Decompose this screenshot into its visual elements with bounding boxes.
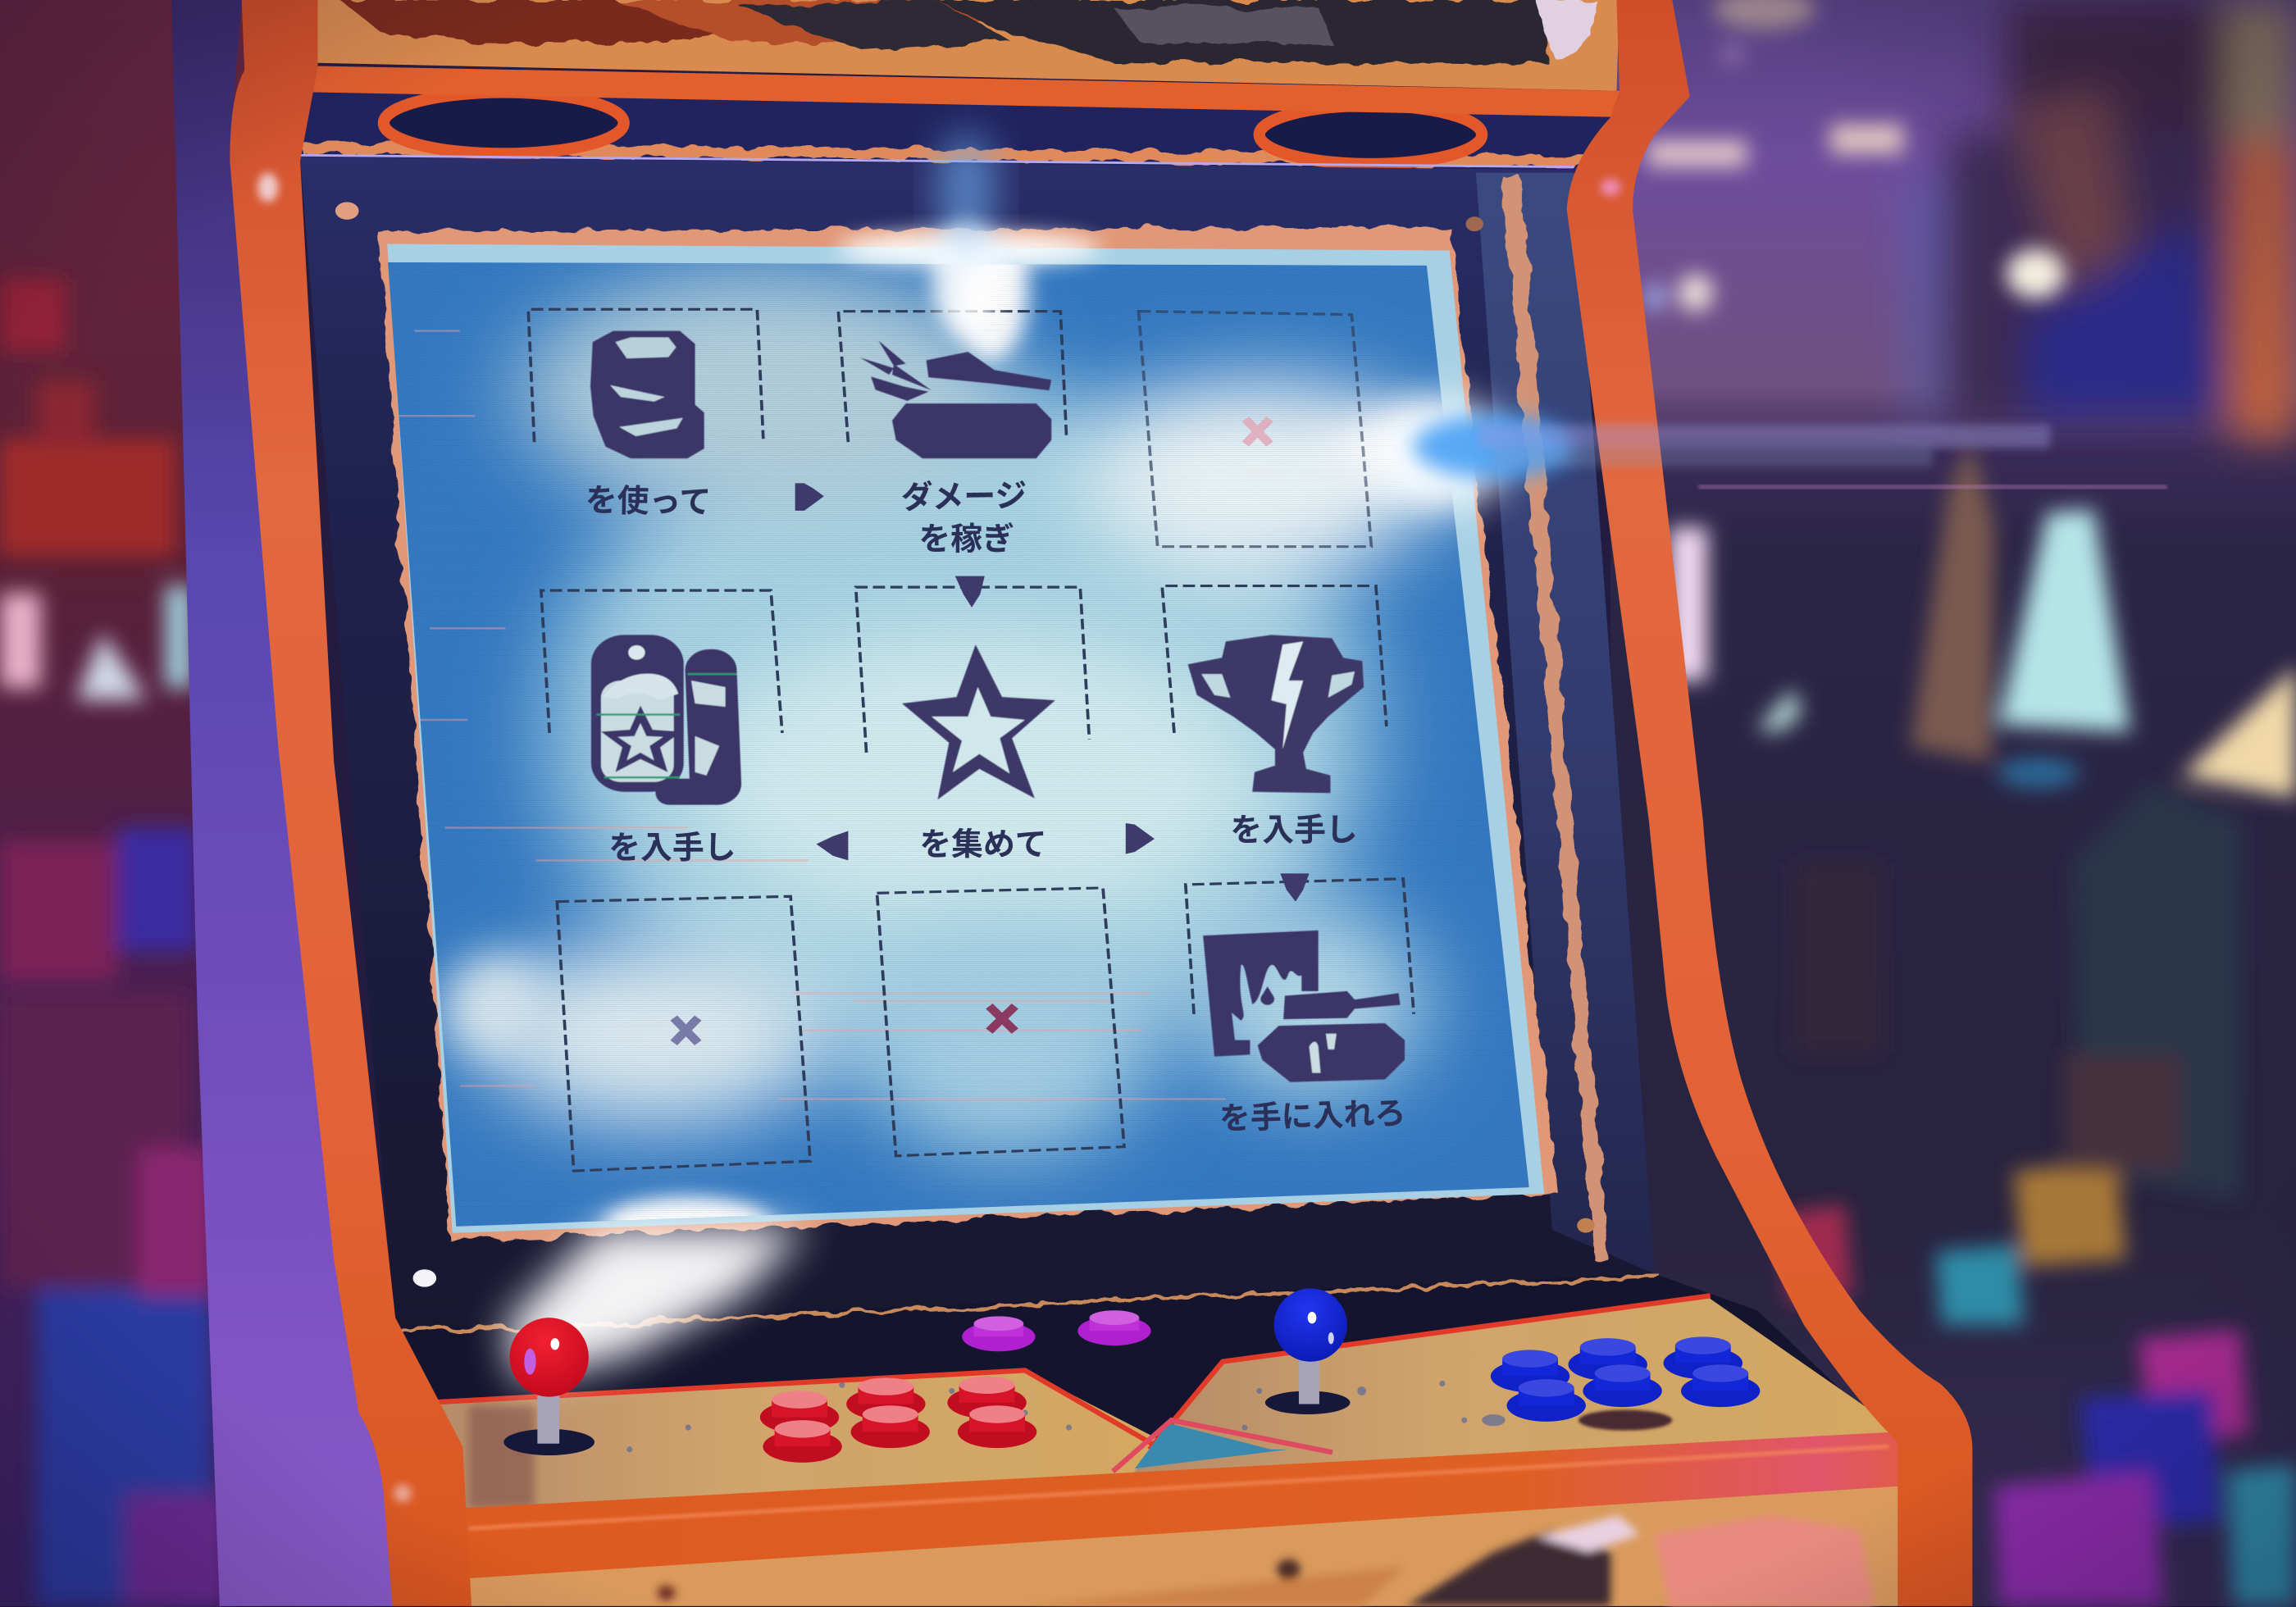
label: を手に入れろ: を手に入れろ	[1219, 1097, 1406, 1136]
flare: right lens streak	[1377, 401, 2167, 507]
screen torn peach border	[378, 227, 1558, 1241]
right orange frame	[1567, 0, 1972, 1606]
dashed icon cells	[528, 309, 1414, 1171]
red action buttons	[760, 1377, 1036, 1463]
label: を集めて: を集めて	[919, 827, 1047, 863]
icon: paint splash with tank	[1203, 931, 1405, 1082]
label: を使って: を使って	[585, 483, 712, 521]
arrows	[795, 483, 1310, 902]
label: ダメージを稼ぎ: を稼ぎ	[918, 522, 1014, 558]
right artwork deck	[1128, 1295, 1889, 1482]
right speaker	[1260, 106, 1482, 164]
beam of reflected light on bezel	[505, 1227, 809, 1384]
screen glow base	[388, 262, 1529, 1227]
blue action buttons	[1491, 1336, 1760, 1422]
icon: coin stack	[590, 331, 704, 458]
red joystick	[503, 1318, 594, 1455]
pale inner screen lip	[387, 244, 1544, 1233]
flare: top of screen	[837, 132, 1101, 337]
icon: dog tags	[591, 635, 742, 806]
blue center decal	[1135, 1423, 1288, 1468]
lower cabinet art	[468, 1479, 1903, 1606]
icon: trophy	[1188, 635, 1364, 793]
screen bezel	[300, 157, 1655, 1336]
cabinet side panel	[171, 0, 395, 1606]
icon: empty slot x	[1246, 419, 1269, 444]
front rail orange	[462, 1427, 1970, 1578]
top orange trim bar	[313, 66, 1620, 117]
speaker panel with two speakers	[300, 91, 1629, 175]
icon: empty slot x	[674, 1018, 698, 1043]
label: ダメージを稼ぎ: ダメージ	[900, 479, 1027, 516]
icon: empty slot x	[989, 1006, 1015, 1031]
left orange frame	[230, 0, 472, 1606]
deck reflection and stain	[468, 1381, 1672, 1508]
arcade screen	[387, 244, 1545, 1233]
icon: tank damage	[860, 341, 1051, 458]
label: を入手し left: を入手し	[608, 831, 736, 866]
glitch lines	[399, 331, 1226, 1099]
left speaker	[384, 92, 624, 154]
left artwork deck	[427, 1370, 1164, 1514]
label: を入手し right: を入手し	[1230, 813, 1358, 848]
start buttons	[962, 1310, 1151, 1351]
icon: star	[902, 644, 1055, 799]
control panel	[395, 1274, 1897, 1514]
screw lights	[335, 202, 1595, 1287]
right inner wall of the bezel with peach strip	[1476, 173, 1655, 1274]
frame highlights	[257, 173, 1621, 1502]
label: ダメージを稼ぎ	[900, 479, 1027, 558]
top marquee art strip	[318, 0, 1620, 91]
blue joystick	[1265, 1288, 1350, 1414]
